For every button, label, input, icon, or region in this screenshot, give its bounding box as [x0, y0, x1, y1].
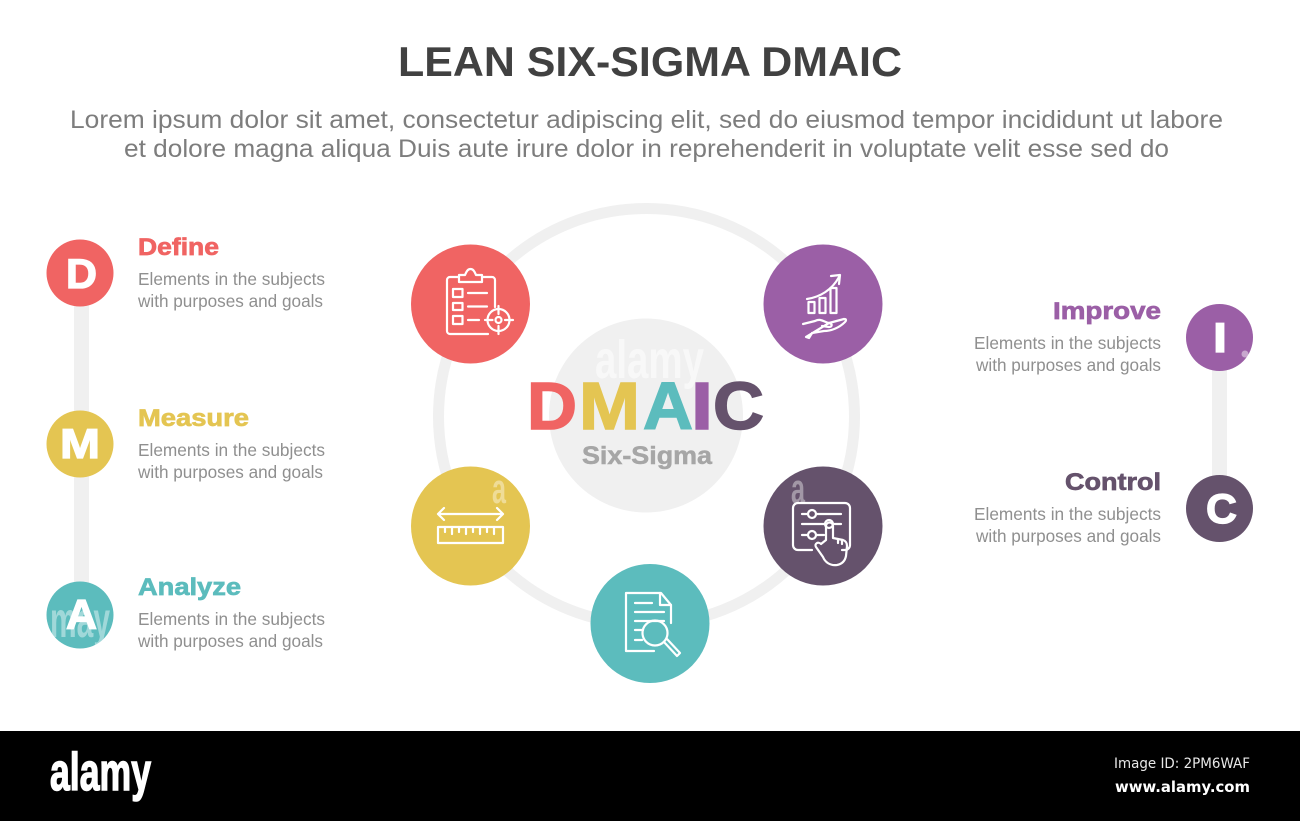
center label: DMAIC: M: [579, 369, 640, 444]
icon: ruler with arrow: [438, 508, 503, 543]
watermark: letter a: a: [492, 465, 506, 512]
center label: DMAIC: C: [713, 369, 764, 444]
icon: document with magnifier: [626, 593, 680, 656]
watermark: center: alamy: [595, 330, 704, 390]
icon: clipboard with target: [447, 269, 513, 334]
panel: left timeline Define Measure Analyze: [46, 234, 325, 651]
diagram: DMAIC ring: [411, 208, 882, 683]
subtitle text: et dolore magna aliqua Duis aute irure dolor in reprehenderit in voluptate velit esse sed do: [124, 135, 1169, 163]
text: Analyze: Elements in the subjects: [138, 609, 325, 629]
text: Improve: [974, 298, 1161, 375]
text: Measure: Measure: [138, 405, 249, 432]
center circle: [549, 318, 743, 512]
text: Measure: with purposes and goals: [137, 462, 323, 482]
step circle: Control sliders: [764, 465, 882, 586]
text: Analyze: with purposes and goals: [137, 631, 323, 651]
step circle: Analyze document: [590, 564, 710, 683]
panel: right timeline Improve Control: [974, 298, 1253, 546]
step circle: Improve chart: [764, 244, 882, 364]
badge: I: [1186, 304, 1253, 371]
subtitle text: Lorem ipsum dolor sit amet, consectetur adipiscing elit, sed do eiusmod tempor incididunt ut labore: [70, 106, 1223, 134]
badge: D: D: [66, 250, 97, 297]
footer url: www.alamy.com: [1115, 778, 1250, 796]
text: Control: Control: [1065, 469, 1161, 496]
text: Define: Define: [138, 234, 219, 261]
text: Define: Elements in the subjects: [138, 269, 325, 289]
badge: A: A: [66, 591, 97, 638]
badge: C: C: [1206, 485, 1237, 532]
step circle: Measure ruler: [411, 465, 530, 586]
text: Improve: Elements in the subjects: [974, 333, 1161, 353]
text: Measure: Elements in the subjects: [138, 440, 325, 460]
center label: DMAIC: I: [691, 369, 713, 444]
icon: hand with growth chart: [803, 275, 846, 338]
footer image id: Image ID: 2PM6WAF: [1114, 756, 1250, 772]
center label: DMAIC: D: [527, 369, 577, 444]
watermark: letter a: a: [791, 465, 805, 512]
badge: M: M: [60, 420, 100, 467]
step circle: Define clipboard: [411, 244, 530, 364]
icon: slider panel with pointing hand: [793, 503, 850, 565]
badge: A: [46, 582, 114, 648]
text: Analyze: [137, 574, 325, 651]
text: Improve: with purposes and goals: [975, 355, 1161, 375]
text: Define: [137, 234, 325, 311]
center label: DMAIC: [527, 369, 764, 444]
footer logo: alamy: [50, 743, 151, 802]
text: Analyze: Analyze: [138, 574, 241, 601]
badge: M: [46, 410, 114, 478]
subtitle text: [70, 106, 1223, 163]
footer bar: image credit: [0, 731, 1300, 821]
text: Measure: [137, 405, 325, 482]
text: Control: Elements in the subjects: [974, 504, 1161, 524]
center label: Six-Sigma: Six-Sigma: [582, 442, 713, 470]
text: Control: [974, 469, 1161, 546]
badge: A: may: [50, 592, 110, 648]
badge: I: I: [1213, 314, 1227, 361]
center label: DMAIC: A: [643, 369, 693, 444]
badge: D: [46, 240, 114, 306]
text: Improve: Improve: [1053, 298, 1161, 325]
text: Control: with purposes and goals: [975, 526, 1161, 546]
text: Define: with purposes and goals: [137, 291, 323, 311]
badge: C: [1186, 475, 1253, 542]
title: LEAN SIX-SIGMA DMAIC: [398, 38, 902, 85]
